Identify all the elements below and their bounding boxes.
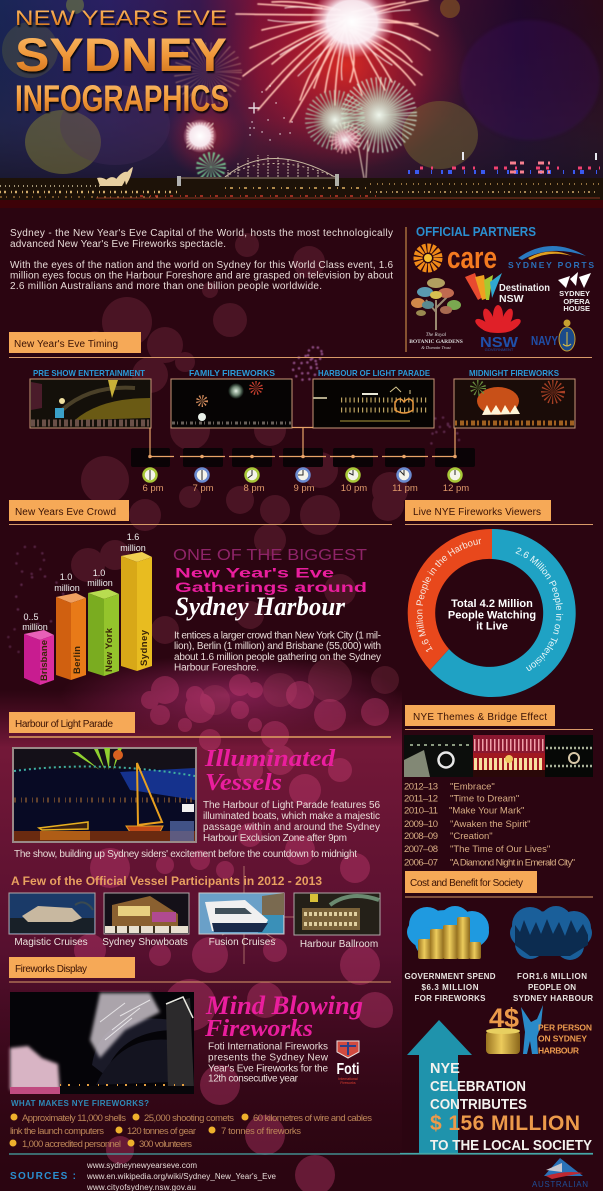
logo: Navy: NAVY bbox=[531, 333, 558, 348]
timing: family fireworks bbox=[171, 368, 292, 428]
donut chart: viewers: 1.6 Million People in the Harbour bbox=[416, 538, 481, 652]
intro text: advanced New Year's Eve Fireworks spectacle. bbox=[10, 239, 226, 250]
paragraph: harbour of light: Harbour Exclusion Zone after 9pm bbox=[203, 833, 347, 844]
crowd paragraph: about 1.6 million people gathering on the Sydney bbox=[174, 652, 381, 663]
logo: Australian Cruise Center: AUSTRALIAN bbox=[532, 1180, 588, 1189]
crowd heading: Gatherings around bbox=[175, 579, 367, 595]
paragraph: harbour of light bbox=[14, 800, 380, 860]
callout: economic contribution: TO THE LOCAL SOCIETY bbox=[430, 1138, 592, 1154]
crowd heading: New Year's Eve bbox=[175, 564, 334, 580]
crowd paragraph: lion), Berlin (1 million) and Brisbane (55,000) with bbox=[174, 641, 381, 652]
themes list: "A Diamond Night in Emerald City" bbox=[450, 858, 575, 868]
themes list: 2007–08 bbox=[404, 844, 438, 855]
section tab: NYE Themes and Bridge Effect bbox=[405, 705, 593, 730]
logo: Sydney Ports: SYDNEY PORTS bbox=[508, 260, 594, 270]
vessel photos bbox=[9, 893, 380, 950]
themes list: 2009–10 bbox=[404, 819, 438, 830]
per person graphic: 4$ bbox=[489, 1003, 519, 1033]
icon: person bbox=[521, 1005, 543, 1054]
timing: pre show entertainment bbox=[30, 368, 151, 428]
fireworks facts: 7 tonnes of fireworks bbox=[221, 1126, 301, 1137]
donut chart: viewers: Total 4.2 Million bbox=[451, 598, 533, 610]
title: NEW YEARS EVE bbox=[15, 6, 227, 30]
section tab: Live NYE Fireworks Viewers bbox=[405, 500, 593, 524]
bar: Berlin bbox=[54, 572, 86, 680]
heading: Mind Blowing Fireworks: Mind Blowing bbox=[205, 991, 363, 1020]
sources bbox=[10, 1161, 277, 1191]
lens orbs bbox=[2, 0, 478, 174]
timing: harbour of light parade: HARBOUR OF LIGHT PARADE bbox=[318, 368, 430, 378]
bar: Sydney: million bbox=[120, 543, 146, 553]
timeline: 10 pm bbox=[341, 483, 367, 494]
title bbox=[15, 6, 229, 119]
donut chart: viewers bbox=[408, 529, 576, 697]
logo: Royal Botanic Gardens: BOTANIC GARDENS bbox=[409, 339, 463, 345]
bar: Sydney bbox=[120, 532, 152, 671]
bar: Brisbane: million bbox=[22, 622, 48, 632]
logo: NSW Government: NSW bbox=[480, 334, 519, 351]
photo: illuminated vessels bbox=[13, 748, 196, 842]
logo: Australian Cruise Center bbox=[532, 1158, 588, 1189]
Sydney Opera House bbox=[97, 167, 133, 186]
donut chart: viewers: People Watching bbox=[448, 610, 536, 622]
fireworks facts: 1,000 accredited personnel bbox=[22, 1139, 121, 1150]
themes list: "Make Your Mark" bbox=[449, 806, 524, 816]
themes list: "Awaken the Spirit" bbox=[450, 819, 530, 830]
timeline: 11 pm bbox=[392, 483, 418, 494]
callout: economic contribution: NYE bbox=[430, 1061, 460, 1077]
heading: Illuminated Vessels: Illuminated bbox=[204, 746, 336, 772]
light streak bbox=[222, 866, 300, 964]
bar: New York bbox=[87, 568, 119, 676]
fireworks facts: 300 volunteers bbox=[139, 1139, 192, 1150]
section tab: New Years Eve Crowd bbox=[9, 500, 392, 524]
cost captions: FOR FIREWORKS bbox=[414, 994, 486, 1003]
vessel: Magistic Cruises bbox=[9, 893, 95, 948]
timeline: 7 pm bbox=[192, 483, 214, 494]
sources: SOURCES : bbox=[10, 1171, 76, 1182]
bar: New York: 1.0 bbox=[93, 568, 105, 578]
intro text: million eyes focus on the Harbour Foreshore and are grasped on television by about bbox=[10, 270, 393, 282]
callout: economic contribution: CELEBRATION bbox=[430, 1079, 526, 1095]
fireworks facts: link the launch computers bbox=[10, 1126, 104, 1137]
themes list: 2012–13 bbox=[404, 782, 438, 792]
sources: www.en.wikipedia.org/wiki/Sydney_New_Year's_Eve bbox=[86, 1172, 277, 1181]
heading: Illuminated Vessels bbox=[204, 746, 336, 796]
bar: Brisbane: Brisbane bbox=[39, 640, 50, 681]
logo: Sydney Opera House: HOUSE bbox=[563, 304, 590, 313]
section tab: NYE Themes and Bridge Effect: NYE Themes & Bridge Effect bbox=[413, 712, 547, 723]
logo: NSW Government bbox=[473, 305, 523, 352]
section tab: Live NYE Fireworks Viewers: Live NYE Fireworks Viewers bbox=[413, 507, 541, 518]
per person graphic: ON SYDNEY bbox=[538, 1034, 587, 1044]
themes list: 2008–09 bbox=[404, 831, 438, 842]
donut chart: viewers: it Live bbox=[476, 620, 508, 632]
sources: www.sydneynewyearseve.com bbox=[86, 1161, 197, 1170]
themes list bbox=[404, 782, 575, 868]
crowd heading bbox=[173, 547, 368, 621]
cost captions bbox=[404, 972, 593, 1003]
intro text: 2.6 million Australians and more than one billion people worldwide. bbox=[10, 281, 322, 292]
icon: coin stack bbox=[486, 1028, 520, 1054]
city lights bbox=[0, 152, 600, 198]
themes list: "The Time of Our Lives" bbox=[450, 844, 550, 855]
paragraph: Foti: presents the Sydney New bbox=[208, 1052, 329, 1064]
paragraph: Foti bbox=[208, 1042, 329, 1084]
logo: care bbox=[418, 240, 497, 275]
crowd heading: Sydney Harbour bbox=[175, 592, 346, 621]
intro text: Sydney - the New Year's Eve Capital of the World, hosts the most technologically bbox=[10, 228, 393, 239]
cost: crowd cloud bbox=[510, 906, 592, 960]
bridge effect photos bbox=[404, 735, 593, 777]
themes list: 2010–11 bbox=[404, 806, 438, 816]
timeline photos bbox=[30, 368, 575, 428]
bar: Sydney: Sydney bbox=[139, 629, 150, 666]
firework: white burst bbox=[183, 119, 217, 153]
section tab: Harbour of Light Parade: Harbour of Light Parade bbox=[15, 719, 113, 730]
arrow: growth bbox=[407, 1020, 472, 1153]
bar: New York: New York bbox=[104, 627, 115, 672]
bar: Brisbane bbox=[22, 612, 54, 685]
heading: vessel participants: A Few of the Official Vessel Participants in 2012 - 2013 bbox=[11, 874, 322, 888]
section tab: Cost and Benefit for Society bbox=[405, 871, 593, 897]
panel: official partners: OFFICIAL PARTNERS bbox=[416, 224, 536, 239]
paragraph: harbour of light: The show, building up Sydney siders' excitement before the countdown to midnight bbox=[14, 849, 357, 860]
section tab: New Year's Eve Timing: New Year's Eve Timing bbox=[14, 339, 118, 350]
cost captions: FOR1.6 MILLION bbox=[517, 972, 587, 981]
decorative sparkles bbox=[8, 347, 459, 652]
bar: Berlin: Berlin bbox=[72, 646, 83, 674]
fireworks facts: 120 tonnes of gear bbox=[127, 1126, 196, 1137]
logo: Destination NSW: Destination bbox=[499, 282, 550, 294]
per person graphic: PER PERSON bbox=[538, 1022, 592, 1032]
callout: economic contribution: CONTRIBUTES bbox=[430, 1097, 527, 1113]
logo: Foti: International bbox=[338, 1077, 358, 1081]
clock icons bbox=[144, 468, 462, 482]
section tab: Harbour of Light Parade bbox=[9, 712, 391, 737]
vessel: Harbour Ballroom: Harbour Ballroom bbox=[300, 939, 378, 950]
themes list: "Embrace" bbox=[450, 782, 495, 792]
timing: midnight fireworks: MIDNIGHT FIREWORKS bbox=[469, 368, 559, 378]
intro text: With the eyes of the nation and the world on Sydney for this World Class event, 1.6 bbox=[10, 260, 393, 271]
timeline bbox=[131, 428, 475, 494]
vessel: Fusion Cruises: Fusion Cruises bbox=[209, 937, 275, 948]
vessel: Sydney Showboats: Sydney Showboats bbox=[102, 937, 188, 948]
paragraph: harbour of light: illuminated boats, which make a majestic bbox=[203, 811, 380, 822]
heading: Mind Blowing Fireworks bbox=[204, 991, 363, 1042]
logo: Royal Botanic Gardens: The Royal bbox=[426, 333, 447, 338]
fireworks facts: 25,000 shooting comets bbox=[144, 1113, 234, 1124]
themes list: 2006–07 bbox=[404, 858, 438, 868]
crowd paragraph bbox=[174, 630, 381, 674]
cost: coins cloud bbox=[407, 906, 489, 959]
fireworks facts: Approximately 11,000 shells bbox=[22, 1113, 126, 1124]
title: SYDNEY bbox=[15, 28, 227, 81]
callout: economic contribution bbox=[430, 1061, 592, 1154]
paragraph: Foti: Foti International Fireworks bbox=[208, 1042, 328, 1052]
logo: Sydney Opera House: SYDNEY bbox=[559, 289, 590, 298]
photo: fireworks over the bridge bbox=[10, 992, 194, 1094]
title: INFOGRAPHICS bbox=[15, 78, 229, 119]
timeline: 6 pm bbox=[142, 483, 164, 494]
section tab: New Years Eve Crowd: New Years Eve Crowd bbox=[15, 507, 116, 518]
paragraph: harbour of light: passage within and around the Sydney bbox=[203, 822, 380, 833]
timeline: 12 pm bbox=[443, 483, 469, 494]
themes list: 2011–12 bbox=[404, 794, 438, 804]
vessel: Magistic Cruises: Magistic Cruises bbox=[14, 937, 88, 948]
donut chart: viewers: 2.6 Million People in on Television bbox=[516, 548, 564, 671]
bar: Berlin: 1.0 bbox=[60, 572, 72, 582]
bar: Berlin: million bbox=[54, 583, 80, 593]
paragraph: Foti: 12th consecutive year bbox=[208, 1074, 299, 1084]
timing: family fireworks: FAMILY FIREWORKS bbox=[189, 368, 275, 378]
firework: green bursts bbox=[191, 55, 409, 178]
logo: Foti: Fireworks bbox=[340, 1081, 356, 1085]
section tab: Fireworks Display: Fireworks Display bbox=[15, 964, 87, 975]
logo: Destination NSW bbox=[465, 273, 550, 305]
vessel: Fusion Cruises bbox=[199, 893, 284, 948]
callout: economic contribution: $ 156 MILLION bbox=[430, 1112, 580, 1135]
per person graphic bbox=[486, 1003, 592, 1056]
timeline: 8 pm bbox=[243, 483, 265, 494]
themes list: "Creation" bbox=[450, 831, 493, 842]
bar: New York: million bbox=[87, 578, 113, 588]
logo: care: care bbox=[447, 240, 497, 275]
bar: Brisbane: 0..5 bbox=[23, 612, 39, 622]
section tab: New Year's Eve Timing bbox=[9, 332, 592, 358]
crowd paragraph: It entices a larger crowd than New York City (1 mil- bbox=[174, 630, 381, 642]
logo: Royal Botanic Gardens bbox=[409, 278, 463, 350]
heading: Mind Blowing Fireworks: Fireworks bbox=[204, 1016, 313, 1042]
logo: NSW Government: GOVERNMENT bbox=[485, 347, 514, 352]
logo: Navy bbox=[531, 320, 575, 351]
timing: harbour of light parade bbox=[313, 368, 434, 428]
logo: Sydney Opera House bbox=[558, 272, 591, 313]
sparkles bbox=[249, 86, 292, 140]
paragraph: harbour of light: The Harbour of Light Parade features 56 bbox=[203, 800, 380, 811]
logo: Foti bbox=[336, 1041, 360, 1085]
logo: Royal Botanic Gardens: & Domain Trust bbox=[421, 345, 451, 350]
intro text bbox=[10, 228, 393, 292]
fireworks facts: WHAT MAKES NYE FIREWORKS? bbox=[11, 1099, 149, 1108]
vessel: Sydney Showboats bbox=[102, 893, 189, 948]
bar: Sydney: 1.6 bbox=[127, 532, 139, 542]
section tab: Fireworks Display bbox=[9, 957, 391, 982]
skyline ground bbox=[0, 178, 603, 200]
logo: Destination NSW: NSW bbox=[499, 293, 524, 305]
timeline: 9 pm bbox=[293, 483, 315, 494]
crowd heading: ONE OF THE BIGGEST bbox=[173, 547, 368, 564]
crowd paragraph: Harbour Foreshore. bbox=[174, 662, 259, 674]
paragraph: Foti: Year's Eve Fireworks for the bbox=[208, 1064, 328, 1074]
heading: Illuminated Vessels: Vessels bbox=[205, 770, 282, 796]
fireworks facts bbox=[10, 1099, 372, 1150]
section tab: Cost and Benefit for Society: Cost and Benefit for Society bbox=[410, 878, 523, 889]
bullet icons bbox=[10, 1114, 248, 1146]
firework: large pink burst bbox=[236, 0, 438, 122]
logo: Sydney Ports bbox=[508, 246, 594, 270]
panel: official partners bbox=[406, 224, 594, 352]
Sydney Harbour Bridge bbox=[177, 155, 339, 186]
timing: pre show entertainment: PRE SHOW ENTERTAINMENT bbox=[33, 368, 146, 378]
cost captions: PEOPLE ON bbox=[528, 983, 576, 992]
cost captions: SYDNEY HARBOUR bbox=[513, 994, 593, 1003]
cost captions: $6.3 MILLION bbox=[422, 983, 479, 992]
bar chart: crowd sizes bbox=[22, 532, 152, 685]
hero photo: fireworks over Sydney Harbour bbox=[0, 0, 603, 208]
fireworks facts: 60 kilometres of wire and cables bbox=[253, 1113, 372, 1124]
vessel: Harbour Ballroom bbox=[294, 893, 380, 950]
themes list: "Time to Dream" bbox=[450, 794, 519, 804]
logo: Foti: Foti bbox=[336, 1061, 360, 1078]
cost captions: GOVERNMENT SPEND bbox=[404, 972, 496, 981]
timing: midnight fireworks bbox=[454, 368, 575, 428]
per person graphic: HARBOUR bbox=[538, 1046, 579, 1056]
logo: Sydney Opera House: OPERA bbox=[563, 297, 591, 306]
